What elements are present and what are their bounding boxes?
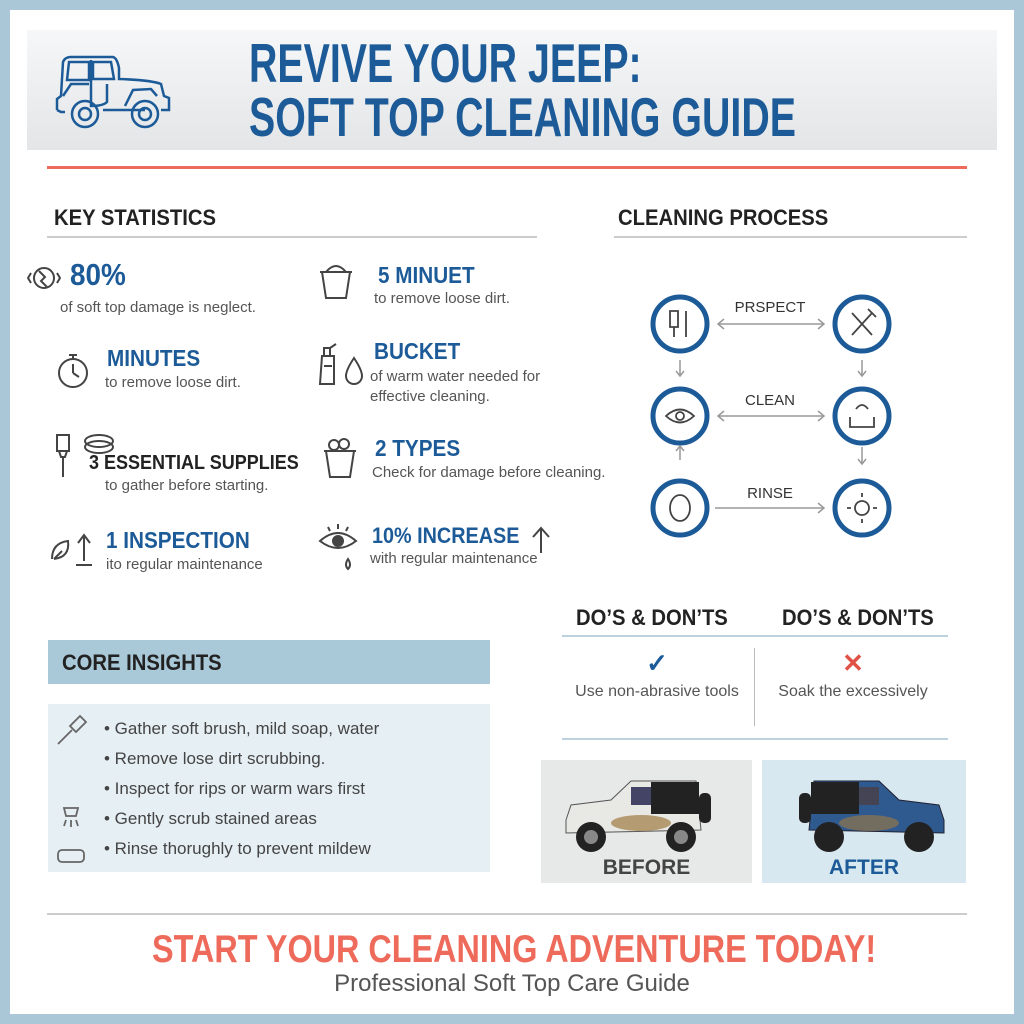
header band	[27, 30, 997, 150]
panel: do's and don'ts	[562, 605, 948, 740]
subtitle: Professional Soft Top Care Guide	[334, 970, 690, 997]
process diagram: RINSE	[747, 485, 793, 502]
process diagram: PRSPECT	[735, 299, 805, 316]
stat 2 types: Check for damage before cleaning.	[372, 464, 605, 481]
heading: core insights: CORE INSIGHTS	[62, 650, 222, 675]
do item: Use non-abrasive tools	[575, 683, 739, 700]
stat 1 inspection	[51, 527, 263, 573]
stat bucket: BUCKET	[374, 338, 460, 364]
do item: ✓	[646, 648, 668, 678]
stat minutes	[58, 345, 241, 391]
stat 1 inspection: 1 INSPECTION	[106, 527, 250, 553]
panel: key statistics	[27, 205, 605, 573]
stat 80%	[27, 257, 256, 316]
stat 3 supplies	[56, 434, 299, 494]
stat 2 types	[324, 435, 605, 481]
stat 3 supplies: 3 ESSENTIAL SUPPLIES	[89, 452, 299, 474]
heading: don'ts: DO’S & DON’TS	[782, 605, 934, 630]
stat bucket: of warm water needed for	[370, 368, 540, 385]
don't item: ✕	[842, 648, 864, 678]
panel: core insights	[48, 640, 490, 872]
insights list: • Remove lose dirt scrubbing.	[104, 749, 325, 768]
stat 10% increase: 10% INCREASE	[372, 523, 519, 548]
insights list: • Gather soft brush, mild soap, water	[104, 719, 379, 738]
heading: cleaning process: CLEANING PROCESS	[618, 205, 828, 230]
label: after: AFTER	[829, 856, 899, 879]
stat bucket	[318, 338, 540, 405]
process diagram: CLEAN	[745, 392, 795, 409]
stat 80%: 80%	[70, 257, 126, 292]
stat 2 types: 2 TYPES	[375, 435, 460, 461]
stat 5 minuet: to remove loose dirt.	[374, 290, 510, 307]
stat minutes: to remove loose dirt.	[105, 374, 241, 391]
stat 10% increase: with regular maintenance	[370, 550, 538, 567]
stat bucket: effective cleaning.	[370, 388, 490, 405]
process diagram	[650, 294, 892, 538]
don't item: Soak the excessively	[778, 683, 928, 700]
stat 1 inspection: ito regular maintenance	[106, 556, 263, 573]
label: before: BEFORE	[603, 856, 690, 879]
heading: core insights	[48, 640, 490, 684]
title	[249, 32, 796, 148]
icon: jeep outline	[56, 56, 170, 128]
heading: key statistics: KEY STATISTICS	[54, 205, 216, 230]
after image	[762, 760, 966, 883]
red divider	[47, 166, 967, 169]
heading: do's: DO’S & DON’TS	[576, 605, 728, 630]
stat 10% increase	[318, 523, 550, 570]
insights list: • Inspect for rips or warm wars first	[104, 779, 365, 798]
stat 3 supplies: to gather before starting.	[105, 477, 268, 494]
stat 80%: of soft top damage is neglect.	[60, 299, 256, 316]
title: SOFT TOP CLEANING GUIDE	[249, 86, 796, 148]
do item	[575, 648, 739, 700]
panel: cleaning process	[614, 205, 967, 538]
insights list	[48, 704, 490, 872]
insights list: • Rinse thorughly to prevent mildew	[104, 839, 371, 858]
call to action: START YOUR CLEANING ADVENTURE TODAY!	[152, 928, 876, 971]
title: REVIVE YOUR JEEP:	[249, 32, 642, 94]
stat 5 minuet: 5 MINUET	[378, 262, 475, 288]
stat minutes: MINUTES	[107, 345, 200, 371]
stat 5 minuet	[320, 262, 510, 307]
insights list: • Gently scrub stained areas	[104, 809, 317, 828]
before image	[541, 760, 752, 883]
don't item	[778, 648, 928, 700]
